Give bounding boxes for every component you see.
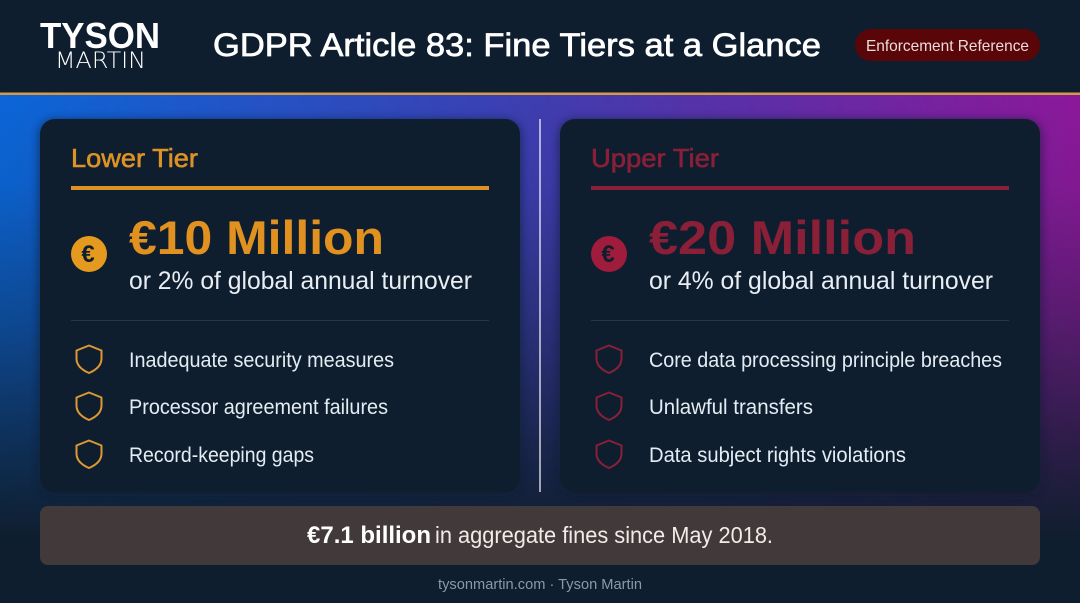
list item: record keeping [76,440,314,468]
list item: transfers: Unlawful transfers [649,396,813,419]
turnover text: or 2% of global annual turnover [129,267,472,295]
callout: aggregate fines: in aggregate fines since May 2018. [435,522,773,548]
logo: Tyson Martin: MARTIN [55,49,146,74]
list item: principles: Core data processing principle breaches [649,349,1002,372]
amount: 10 million: €10 Million [129,211,384,264]
title: GDPR Article 83: Fine Tiers at a Glance [213,27,821,63]
list item: processor [76,392,388,420]
panel: upper tier [560,119,1040,492]
list item: rights [596,440,906,468]
amount: 20 million: €20 Million [649,211,916,264]
list item: security [76,346,394,373]
badge: enforcement reference [855,29,1040,61]
panel: lower tier [40,119,520,492]
footer: tysonmartin.com · Tyson Martin [438,577,642,593]
list item: security: Inadequate security measures [129,349,394,372]
callout: aggregate fines [40,506,1040,565]
heading: upper tier: Upper Tier [591,143,719,173]
heading: lower tier: Lower Tier [71,143,198,173]
turnover text: or 4% of global annual turnover [649,267,993,295]
icon: euro coin [71,236,107,272]
icon: euro coin [591,236,627,272]
list item: transfers [596,392,813,420]
list item: rights: Data subject rights violations [649,444,906,467]
callout: aggregate fines: €7.1 billion [307,522,431,549]
logo: Tyson Martin: TYSON [40,15,160,56]
list item: record keeping: Record-keeping gaps [129,444,314,467]
list item: principles [596,346,1002,373]
list item: processor: Processor agreement failures [129,396,388,419]
header bar [0,0,1080,95]
logo: Tyson Martin [40,15,160,74]
badge: enforcement reference: Enforcement Reference [866,38,1029,55]
icon: euro coin: € [601,241,615,268]
icon: euro coin: € [81,241,95,268]
